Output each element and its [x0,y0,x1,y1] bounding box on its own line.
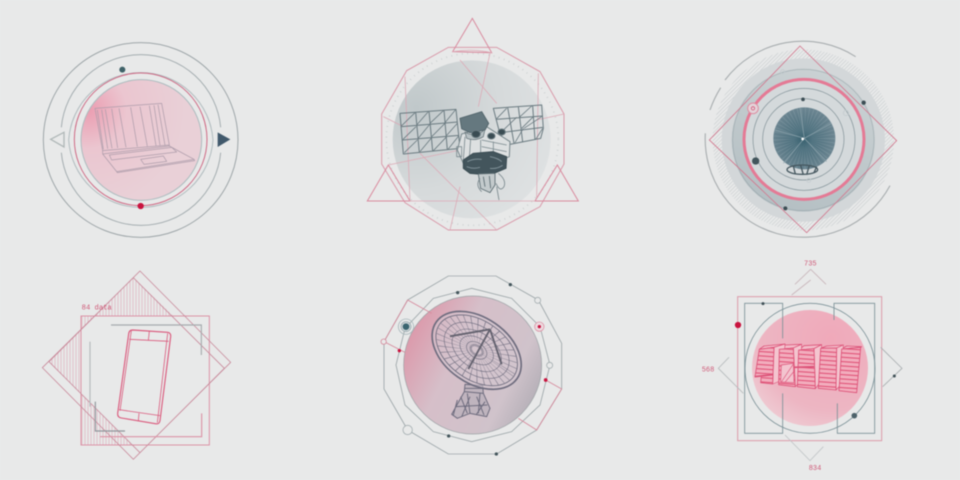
solar panel left [400,109,460,154]
icon: server racks [755,344,862,393]
panel: smartphone emblem [42,271,231,459]
dish [418,295,536,405]
teal frames and circle [745,303,875,433]
pedestal [452,384,490,418]
inner polygon [396,288,550,442]
chevron and label: 834 [785,435,823,473]
nodes [381,283,553,456]
panel: satellite emblem [367,18,578,230]
orbit dots [748,70,866,210]
corner brackets [90,325,202,437]
red dodecagon frame [382,47,564,230]
shaded disc [404,296,542,434]
square frame [738,297,882,441]
arrow right [218,132,230,147]
rack details [781,363,794,383]
pink disc [81,80,202,200]
chevron and label: 568 [702,357,743,393]
concentric rings [43,43,238,237]
panel: laptop emblem [43,43,238,237]
thin orbit circles [733,69,874,211]
arrow left [51,132,64,147]
dots [735,302,896,418]
crossing lines [383,50,564,230]
outer pale disc [722,58,885,222]
red connector lines [384,300,562,430]
icon: laptop [95,103,195,173]
rack tops [759,344,862,350]
chevron and label: 568: 568 [702,366,714,374]
hatched ring [717,54,889,226]
icon: dish top view [773,107,835,175]
diamond frame [709,46,897,233]
outer dodecagon [384,276,562,454]
pink ring [744,79,864,199]
chevron and label: 735 [792,260,826,295]
chevron and label: 735: 735 [804,260,817,268]
hatching [49,278,173,445]
inner light disc [744,79,864,199]
rack fronts [755,347,861,393]
grey disc [393,60,551,218]
label: 84 data: 84 data [82,304,112,312]
diamond frame [42,271,231,459]
icon: phone [118,330,171,424]
red square frame [81,316,209,445]
tick ring [386,53,558,225]
chevron right [881,347,902,387]
panel: server racks emblem [702,260,902,473]
mid disc [732,68,875,212]
rack side panels [773,344,843,390]
icon: satellite [400,105,543,200]
chevron and label: 834: 834 [809,465,821,473]
icon: radio telescope [418,295,536,418]
dish radial mesh [446,322,508,379]
solar panel right [493,105,543,145]
satellite body [457,112,510,200]
pink disc [752,310,868,426]
ring dots [119,67,144,209]
red triangles [367,18,578,201]
panel: antenna top view emblem [705,41,897,237]
panel: radio dish emblem [381,276,562,456]
outer arcs [705,41,890,237]
